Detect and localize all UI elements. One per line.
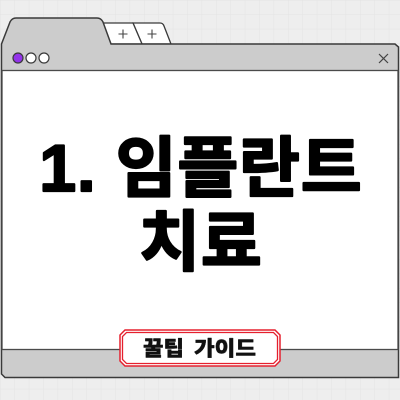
badge frame (120, 330, 280, 366)
browser tab: plus 1 (102, 23, 142, 44)
window buttons (13, 53, 49, 63)
title: 1. 임플란트 (39, 131, 363, 205)
badge label (143, 338, 256, 360)
icon: close (379, 54, 388, 63)
badge label: 꿀팁 (143, 338, 184, 360)
title (39, 131, 363, 279)
content area (2, 70, 398, 350)
browser tab: plus 2 (133, 23, 171, 44)
title: 치료 (139, 205, 263, 279)
badge label: 가이드 (194, 338, 256, 360)
